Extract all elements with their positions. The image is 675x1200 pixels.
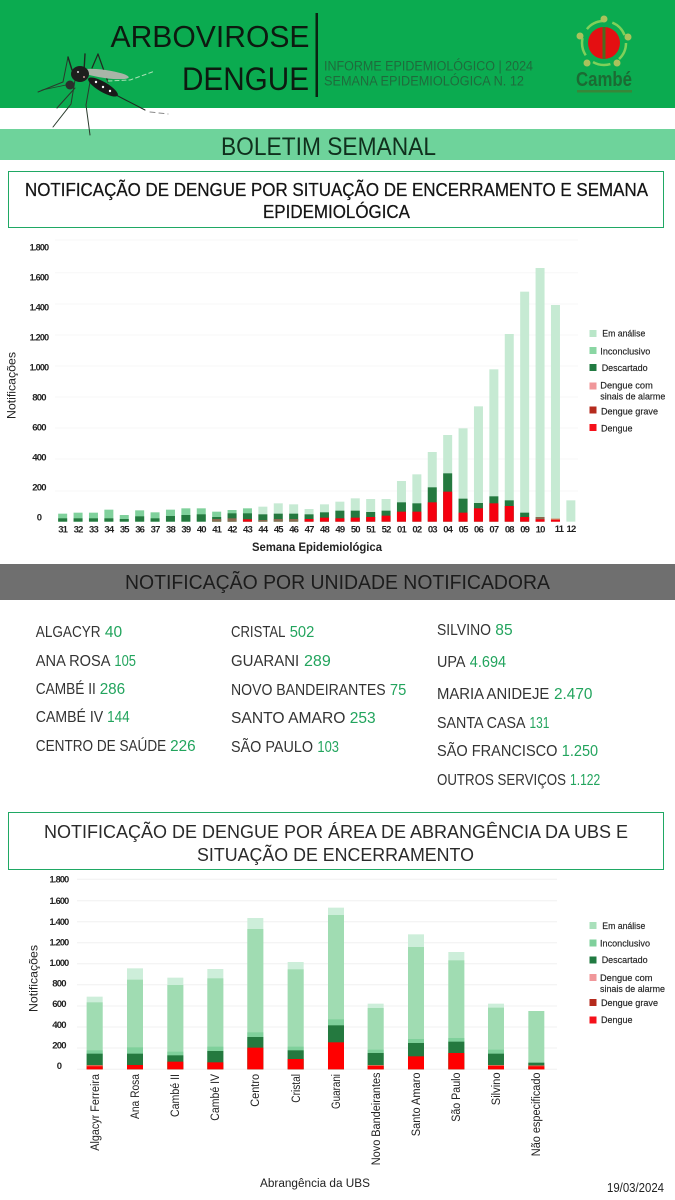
x axis week labels: 40	[197, 524, 206, 536]
panel: units column 3: OUTROS SERVIÇOS	[437, 772, 566, 789]
x axis week labels: 46	[289, 524, 299, 536]
legend: Inconclusivo	[600, 346, 650, 356]
panel: units column 3: SANTA CASA	[437, 715, 526, 732]
report subtitle	[324, 58, 533, 88]
x axis week labels: 35	[120, 524, 130, 536]
y axis labels: 1.400	[50, 917, 69, 928]
legend	[590, 328, 665, 434]
chart 1 heading	[8, 172, 664, 228]
logo: Cambé: Cambé	[576, 69, 632, 91]
x axis week labels: 37	[151, 524, 160, 536]
y axis title: Notificações	[5, 352, 19, 419]
x axis week labels: 45	[274, 524, 284, 536]
chart: notificações por área de abrangência da UBS	[26, 874, 665, 1190]
header band	[0, 0, 675, 108]
x axis week labels: 44	[258, 524, 269, 536]
y axis labels: 400	[32, 452, 46, 464]
panel: units column 3: UPA	[437, 654, 466, 671]
x axis week labels: 47	[305, 524, 314, 536]
panel: units column 2: SÃO PAULO	[231, 736, 313, 756]
legend: sinais de alarme	[600, 392, 665, 402]
y axis labels: 1.600	[30, 272, 49, 284]
x axis UBS labels: Algacyr Ferreira	[90, 1073, 102, 1151]
x axis week labels: 11	[555, 524, 565, 535]
stacked bars by UBS	[87, 908, 544, 1069]
legend: Em análise	[602, 328, 645, 338]
date: 19/03/2024	[607, 1180, 664, 1195]
panel: units column 1: 105	[114, 653, 136, 670]
y axis labels: 200	[32, 482, 46, 494]
icon: mosquito	[38, 54, 168, 135]
x axis UBS labels: Santo Amaro	[411, 1072, 423, 1136]
x axis week labels: 07	[489, 524, 499, 536]
report subtitle: INFORME EPIDEMIOLÓGICO | 2024	[324, 58, 533, 74]
y axis labels: 1.600	[50, 896, 69, 907]
panel: units column 1: CENTRO DE SAÚDE	[36, 736, 166, 755]
x axis week labels: 32	[74, 524, 83, 536]
x axis week labels: 33	[89, 524, 98, 536]
panel: units column 3	[437, 622, 600, 789]
y axis labels: 1.800	[50, 874, 69, 886]
y axis labels: 400	[52, 1020, 66, 1031]
x axis UBS labels: Novo Bandeirantes	[371, 1072, 383, 1165]
panel: units column 2: 502	[290, 624, 314, 641]
x axis week labels: 36	[135, 524, 145, 536]
panel: units column 1: 286	[100, 681, 125, 698]
x axis UBS labels: Não especificado	[531, 1072, 543, 1156]
panel: units column 1	[36, 624, 196, 755]
heading band: notificação por unidade notificadora	[0, 564, 675, 600]
legend: Dengue grave	[601, 998, 658, 1008]
x axis title: Abrangência da UBS	[260, 1178, 370, 1190]
x axis week labels: 03	[428, 524, 437, 536]
x axis UBS labels	[90, 1072, 543, 1165]
heading band: boletim semanal	[0, 129, 675, 161]
panel: units column 3: 85	[495, 622, 513, 639]
x axis week labels: 09	[520, 524, 530, 536]
y axis labels: 1.200	[30, 332, 49, 344]
y axis labels	[50, 874, 69, 1072]
x axis week labels: 43	[243, 524, 252, 536]
panel: units column 3: 1.250	[562, 743, 598, 760]
legend: Dengue	[601, 424, 632, 434]
panel: units column 1: ANA ROSA	[36, 653, 111, 670]
panel: units column 1: CAMBÉ IV	[36, 707, 103, 726]
panel: units column 2: NOVO BANDEIRANTES	[231, 682, 386, 699]
chart 2 heading: SITUAÇÃO DE ENCERRAMENTO	[197, 844, 474, 865]
legend: Dengue com	[600, 380, 653, 390]
x axis UBS labels: Ana Rosa	[130, 1073, 142, 1119]
x axis week labels: 42	[228, 524, 237, 536]
y axis labels: 600	[52, 999, 66, 1010]
x axis week labels: 48	[320, 524, 329, 536]
x axis week labels: 41	[212, 524, 223, 536]
x axis week labels: 08	[505, 524, 514, 536]
x axis week labels: 05	[459, 524, 469, 536]
y axis labels: 0	[57, 1061, 62, 1072]
panel: units column 1: ALGACYR	[36, 624, 101, 641]
x axis week labels: 04	[443, 524, 454, 536]
x axis week labels: 02	[412, 524, 422, 536]
x axis week labels: 52	[382, 524, 391, 536]
panel: units column 2: 75	[390, 682, 406, 699]
x axis UBS labels: Guarani	[331, 1074, 343, 1109]
x axis UBS labels: Cambé II	[170, 1074, 182, 1117]
chart: notificações por semana epidemiológica	[5, 240, 665, 554]
x axis week labels: 06	[474, 524, 483, 536]
x axis week labels: 34	[104, 524, 115, 536]
legend: Dengue grave	[601, 406, 658, 416]
legend: Inconclusivo	[600, 938, 650, 948]
y axis labels: 1.200	[50, 938, 69, 948]
panel: units column 2: CRISTAL	[231, 624, 285, 641]
panel: units column 2: 103	[317, 739, 339, 756]
y axis labels: 800	[52, 978, 66, 990]
panel: units column 2: 289	[304, 653, 331, 670]
y axis labels: 800	[32, 392, 46, 404]
panel: units column 2: 253	[350, 710, 376, 727]
panel: units column 3: 4.694	[470, 654, 506, 671]
title: arbovirose dengue	[110, 19, 310, 97]
panel: units column 3: SILVINO	[437, 622, 491, 639]
panel: units column 2: GUARANI	[231, 653, 299, 670]
title: arbovirose dengue: DENGUE	[182, 61, 309, 97]
panel: units column 1: 226	[170, 738, 196, 755]
panel: units column 2	[231, 624, 406, 756]
panel: units column 3: SÃO FRANCISCO	[437, 740, 558, 760]
title: arbovirose dengue: ARBOVIROSE	[110, 19, 310, 54]
y axis labels: 1.000	[50, 958, 69, 969]
panel: units column 3: MARIA ANIDEJE	[437, 686, 549, 703]
report subtitle: SEMANA EPIDEMIOLÓGICA N. 12	[324, 74, 524, 88]
x axis week labels: 51	[366, 524, 377, 536]
chart 1 heading: EPIDEMIOLÓGICA	[263, 201, 411, 222]
x axis UBS labels: Cristal	[291, 1074, 303, 1103]
logo: Cambé	[576, 16, 632, 92]
x axis week labels: 10	[536, 524, 545, 536]
x axis UBS labels: Centro	[250, 1074, 262, 1107]
chart 2 heading: NOTIFICAÇÃO DE DENGUE POR ÁREA DE ABRANGÊNCIA DA UBS E	[44, 821, 628, 842]
chart 2 heading	[8, 812, 664, 870]
x axis week labels: 50	[351, 524, 360, 536]
x axis UBS labels: São Paulo	[451, 1072, 463, 1122]
panel: units column 2: SANTO AMARO	[231, 710, 345, 727]
x axis week labels: 31	[58, 524, 69, 536]
y axis title: Notificações	[26, 945, 40, 1012]
x axis week labels: 49	[335, 524, 345, 536]
y axis labels: 1.000	[30, 362, 49, 374]
x axis UBS labels: Silvino	[491, 1072, 503, 1105]
y axis labels: 1.800	[30, 242, 49, 254]
x axis week labels	[58, 524, 576, 536]
heading band: boletim semanal: BOLETIM SEMANAL	[221, 133, 436, 161]
y axis labels	[30, 242, 49, 524]
legend: Descartado	[602, 955, 648, 965]
x axis week labels: 01	[397, 524, 407, 536]
heading band: notificação por unidade notificadora: NOTIFICAÇÃO POR UNIDADE NOTIFICADORA	[125, 571, 550, 594]
panel: units column 3: 131	[530, 715, 549, 732]
legend: Dengue	[601, 1015, 632, 1025]
legend: sinais de alarme	[600, 984, 665, 994]
stacked bars by week	[58, 268, 575, 522]
x axis title: Semana Epidemiológica	[252, 542, 383, 554]
x axis week labels: 39	[181, 524, 191, 536]
x axis UBS labels: Cambé IV	[210, 1074, 222, 1121]
y axis labels: 600	[32, 422, 46, 434]
legend: Dengue com	[600, 973, 652, 983]
y axis labels: 200	[52, 1040, 66, 1052]
y axis labels: 0	[37, 512, 42, 524]
legend	[590, 921, 665, 1025]
panel: units column 3: 1.122	[570, 772, 600, 789]
panel: units column 1: 40	[105, 624, 122, 641]
legend: Descartado	[602, 363, 648, 373]
panel: units column 1: 144	[107, 709, 130, 726]
y axis labels: 1.400	[30, 302, 49, 314]
panel: units column 3: 2.470	[554, 686, 592, 703]
panel: units column 1: CAMBÉ II	[36, 679, 96, 698]
x axis week labels: 12	[567, 524, 576, 535]
x axis week labels: 38	[166, 524, 175, 536]
legend: Em análise	[602, 921, 645, 931]
